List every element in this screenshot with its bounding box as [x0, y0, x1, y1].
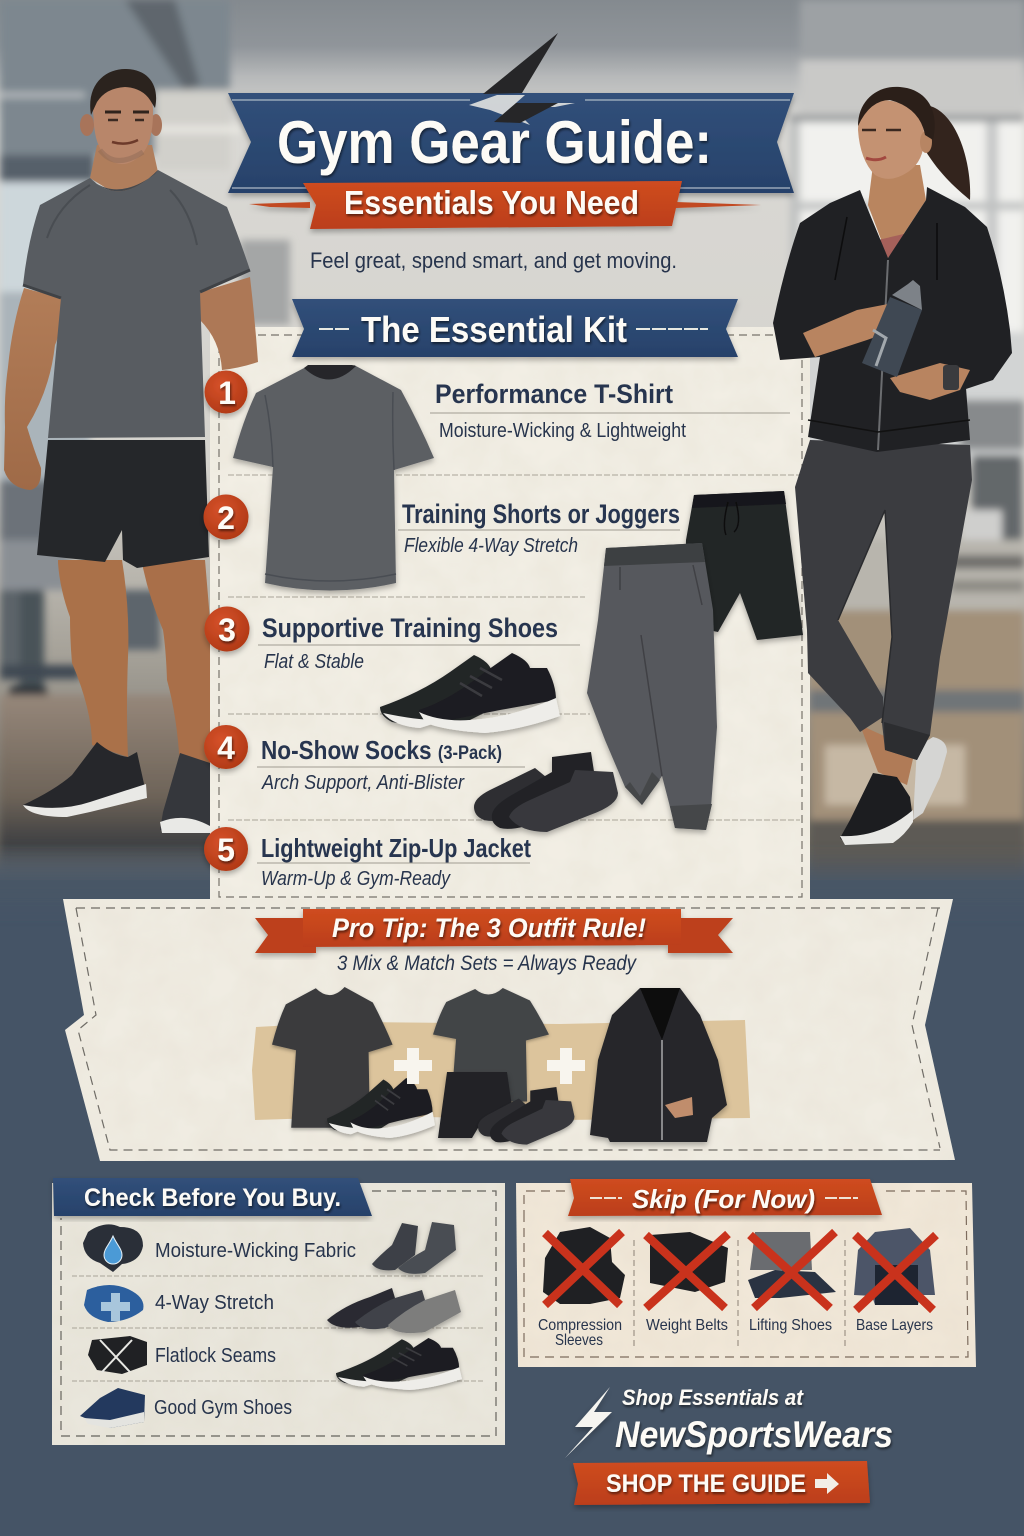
title text: Gym Gear Guide: [277, 109, 712, 176]
skip item: lifting shoes: Lifting Shoes [749, 1317, 832, 1334]
item 4: no-show socks: Arch Support, Anti-Blister [261, 772, 465, 794]
shop button [573, 1461, 870, 1505]
skip item: weight belts [646, 1232, 728, 1334]
outfit 1: t-shirt [272, 987, 393, 1128]
illustration: grey joggers [587, 543, 717, 830]
brand name: NewSportsWears [615, 1414, 893, 1455]
skip ribbon: Skip (For Now) [632, 1184, 815, 1214]
illustration: man in gym clothes [4, 69, 258, 833]
rear shoe [913, 737, 947, 820]
icon: 4-way stretch [84, 1285, 143, 1322]
panel: skip for now [516, 1179, 976, 1367]
grey t-shirt [23, 170, 250, 438]
label: flatlock seams: Flatlock Seams [155, 1345, 276, 1367]
item 5: lightweight zip-up jacket: Warm-Up & Gym-Ready [261, 868, 451, 890]
panel: pro tip [63, 899, 955, 1161]
illustration: training shoes [380, 653, 560, 733]
skip item: compression sleeves [538, 1227, 625, 1349]
skip item: compression sleeves: Compression [538, 1317, 622, 1334]
label: moisture-wicking fabric: Moisture-Wicking Fabric [155, 1240, 356, 1262]
right shoe [160, 753, 210, 832]
illustration: black shorts [684, 491, 803, 640]
outfit 2: socks [478, 1087, 574, 1145]
left arm [4, 288, 61, 490]
tan paper strip [252, 1020, 750, 1120]
three socks [327, 1288, 461, 1333]
right leg [143, 560, 210, 770]
plus sign 2 [547, 1048, 585, 1084]
jogger pants [795, 440, 972, 760]
call to action [565, 1385, 893, 1505]
front shoe [840, 773, 913, 843]
pro tip ribbon [255, 909, 733, 953]
pro tip ribbon: Pro Tip: The 3 Outfit Rule! [332, 913, 646, 943]
shoes pair [336, 1338, 462, 1390]
shop line: Shop Essentials at [622, 1385, 805, 1410]
black zip hoodie [773, 187, 1012, 452]
item 1: performance t-shirt: Performance T-Shirt [435, 379, 673, 409]
pink top [878, 233, 908, 258]
illustration: woman with bottle [773, 87, 1012, 845]
outfit 1: shoes [327, 1078, 435, 1138]
skip item: compression sleeves: Sleeves [555, 1332, 603, 1349]
socks pair [372, 1222, 456, 1274]
black shorts [37, 440, 209, 568]
shop button: SHOP THE GUIDE [606, 1470, 806, 1498]
illustration: grey t-shirt [233, 365, 434, 590]
title bolt icon [469, 33, 575, 125]
item 2: training shorts or joggers: 2 [217, 500, 235, 536]
skip item: base layers: Base Layers [856, 1317, 933, 1334]
item 5: lightweight zip-up jacket [204, 827, 531, 890]
icon: flatlock seams [88, 1336, 147, 1374]
item 5: lightweight zip-up jacket: Lightweight Zip-Up Jacket [261, 833, 531, 863]
neck and head [90, 145, 158, 198]
item 3: supportive training shoes [204, 606, 580, 673]
skip item: base layers [854, 1228, 936, 1334]
panel: pro tip: 3 Mix & Match Sets = Always Ready [337, 952, 637, 975]
label: good gym shoes: Good Gym Shoes [154, 1397, 292, 1419]
skip item: weight belts: Weight Belts [646, 1317, 728, 1334]
icon: water drop on fabric [83, 1224, 143, 1272]
outfit 2: t-shirt [433, 988, 549, 1102]
item 2: training shorts or joggers: Training Shorts or Joggers [402, 499, 680, 529]
tagline: Feel great, spend smart, and get moving. [310, 248, 677, 273]
item 4: no-show socks [204, 725, 525, 794]
skip item: lifting shoes [748, 1232, 836, 1334]
title banner [228, 93, 794, 193]
check banner [53, 1178, 372, 1216]
section banner: the essential kit [292, 299, 738, 357]
left shoe [23, 742, 147, 817]
item 3: supportive training shoes: Flat & Stable [264, 651, 364, 673]
check banner: Check Before You Buy. [84, 1184, 341, 1212]
outfit 2: shorts [438, 1072, 514, 1138]
left forearm and hand [803, 303, 895, 357]
item 3: supportive training shoes: 3 [218, 612, 236, 648]
section banner: the essential kit: The Essential Kit [361, 309, 627, 350]
panel: the essential kit [210, 327, 810, 905]
outfit 3: zip jacket [590, 988, 727, 1142]
item 1: performance t-shirt: 1 [218, 375, 236, 411]
item 1: performance t-shirt [204, 370, 790, 442]
illustration: no-show socks [474, 752, 618, 832]
right hand and watch [890, 363, 970, 400]
plus sign 1 [394, 1048, 432, 1084]
item 1: performance t-shirt: Moisture-Wicking & Lightweight [439, 420, 686, 442]
item 4: no-show socks: 4 [217, 730, 235, 766]
subtitle ribbon [249, 181, 761, 229]
shaker bottle [862, 297, 922, 377]
left leg [58, 560, 128, 757]
icon: gym shoes [80, 1388, 145, 1428]
item 5: lightweight zip-up jacket: 5 [217, 832, 235, 868]
label: 4-way stretch: 4-Way Stretch [155, 1292, 274, 1314]
panel: check before you buy [52, 1178, 505, 1445]
rear ankle and front ankle [860, 725, 915, 785]
lightning bolt icon [565, 1387, 612, 1458]
right arm [198, 277, 258, 370]
item 2: training shorts or joggers [204, 494, 680, 557]
neck and head [868, 165, 926, 258]
ponytail [925, 105, 970, 200]
skip ribbon [568, 1179, 882, 1216]
item 2: training shorts or joggers: Flexible 4-Way Stretch [404, 535, 578, 557]
item 4: no-show socks: No-Show Socks (3-Pack) [261, 735, 502, 765]
item 3: supportive training shoes: Supportive Training Shoes [262, 613, 558, 643]
subtitle ribbon: Essentials You Need [344, 184, 639, 221]
